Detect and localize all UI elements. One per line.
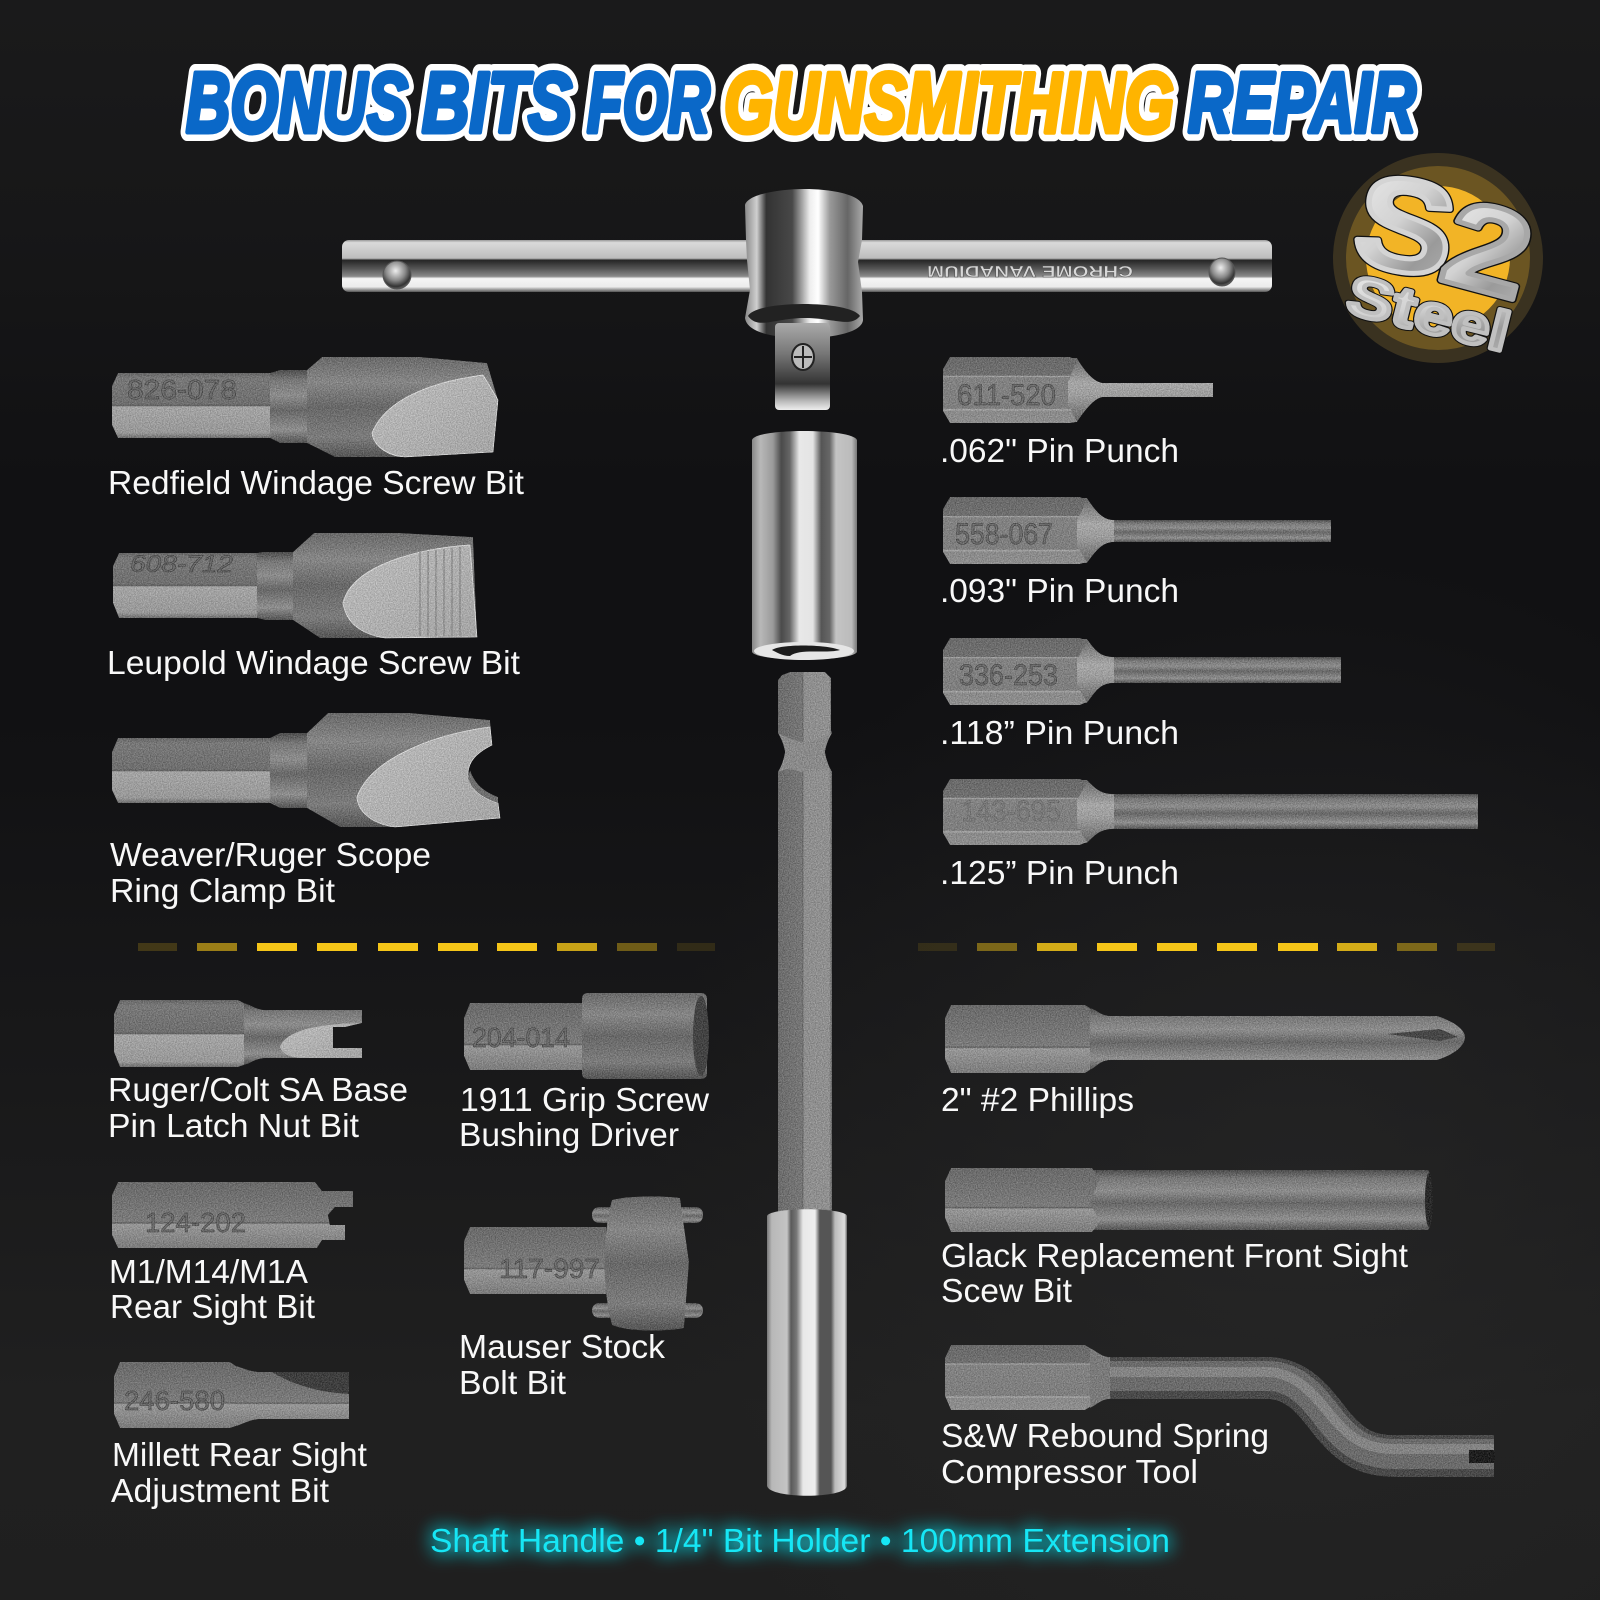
footer caption: Shaft Handle • 1/4" Bit Holder • 100mm Extension [430, 1522, 1170, 1559]
icon: Ruger/Colt bit [114, 1000, 362, 1067]
title blue words [186, 56, 1416, 151]
label line 2: Bushing Driver [459, 1116, 679, 1153]
bit: Ruger/Colt SA [108, 1000, 408, 1144]
label line 2: Pin Latch Nut Bit [108, 1107, 359, 1144]
label: Leupold Windage Screw Bit [107, 644, 520, 681]
bit: .062 pin punch [940, 357, 1213, 469]
bit: Mauser stock bolt [459, 1196, 703, 1401]
icon: Millett bit: 246-580 [124, 1385, 225, 1416]
label: 1911 Grip Screw [460, 1081, 709, 1118]
label: Millett Rear Sight [112, 1436, 367, 1473]
handle bar [342, 240, 1272, 292]
label line 2: Rear Sight Bit [110, 1288, 315, 1325]
label line 2: Compressor Tool [941, 1453, 1198, 1490]
icon: .062 punch [943, 357, 1213, 423]
bit holder socket [752, 431, 857, 660]
label: Ruger/Colt SA Base [108, 1071, 408, 1108]
bar screw left [383, 261, 411, 289]
title outline: BONUS [186, 56, 408, 151]
icon: Mauser bit [464, 1196, 703, 1331]
label: .118” Pin Punch [940, 714, 1179, 751]
icon: Phillips bit [945, 1005, 1465, 1073]
icon: .125 punch [943, 779, 1478, 845]
icon: .093 punch [943, 497, 1331, 564]
icon: Weaver bit [112, 713, 500, 827]
badge: S2 Steel [1333, 144, 1546, 364]
title blue words: REPAIR [1188, 56, 1416, 151]
icon: Redfield bit: 826-078 [127, 374, 237, 405]
bit: .093 pin punch [940, 497, 1331, 609]
icon: Redfield bit [112, 357, 498, 457]
label: .125” Pin Punch [940, 854, 1179, 891]
left dashed divider [138, 943, 715, 951]
icon: .118 punch: 336-253 [959, 659, 1058, 692]
bit: Leupold windage [107, 533, 520, 681]
icon: M1 bit [112, 1182, 353, 1248]
bit: 1911 grip screw [459, 993, 709, 1153]
title outline: BITS [422, 56, 572, 151]
icon: .062 punch: 611-520 [957, 379, 1056, 412]
badge Steel: Steel [1341, 263, 1516, 364]
slider socket [745, 189, 863, 338]
bit: .125 pin punch [940, 779, 1478, 891]
badge Steel outline: Steel [1341, 263, 1516, 364]
title blue words: BITS [422, 56, 572, 151]
bar screw right [1209, 258, 1235, 286]
bit: Weaver/Ruger scope ring clamp [110, 713, 500, 909]
label line 2: Ring Clamp Bit [110, 872, 335, 909]
title blue words: BONUS [186, 56, 408, 151]
label: S&W Rebound Spring [941, 1417, 1269, 1454]
right dashed divider [918, 943, 1495, 951]
icon: Mauser bit: 117-997 [499, 1253, 600, 1284]
T-handle [342, 189, 1272, 410]
extension holder sleeve [767, 1209, 847, 1496]
bit: 2in #2 Phillips [941, 1005, 1465, 1118]
title outline: GUNSMITHING [724, 56, 1174, 151]
label line 2: Adjustment Bit [111, 1472, 329, 1509]
socket rim shine [748, 304, 860, 323]
bit: S&W rebound spring compressor [941, 1345, 1495, 1490]
label line 2: Bolt Bit [459, 1364, 566, 1401]
bit: M1/M14/M1A [109, 1182, 353, 1325]
icon: .118 punch [943, 638, 1341, 705]
badge S: S [1344, 144, 1467, 307]
title yellow word: GUNSMITHING [724, 56, 1174, 151]
bar engraving: CHROME VANADIUM [927, 262, 1133, 279]
100mm hex extension [778, 672, 832, 1214]
label: .093" Pin Punch [940, 572, 1179, 609]
title [186, 56, 1416, 151]
icon: 1911 bit [464, 993, 709, 1079]
icon: 1911 bit: 204-014 [472, 1022, 570, 1053]
icon: Leupold bit: 608-712 [130, 551, 233, 578]
label: Mauser Stock [459, 1328, 665, 1365]
label: Weaver/Ruger Scope [110, 836, 431, 873]
icon: S&W tool [945, 1345, 1495, 1463]
label: .062" Pin Punch [940, 432, 1179, 469]
icon: Leupold bit [113, 533, 477, 638]
title blue words: FOR [587, 56, 710, 151]
bit: Redfield windage [108, 357, 524, 501]
bit: Millett rear sight [111, 1362, 367, 1509]
icon: .125 punch: 143-695 [961, 795, 1061, 828]
bit: .118 pin punch [940, 638, 1341, 751]
icon: M1 bit: 124-202 [145, 1207, 246, 1238]
title outline: FOR [587, 56, 710, 151]
badge 2 outline: 2 [1429, 173, 1546, 327]
icon: .093 punch: 558-067 [955, 518, 1053, 551]
label: Glack Replacement Front Sight [941, 1237, 1408, 1274]
label: Redfield Windage Screw Bit [108, 464, 524, 501]
label line 2: Scew Bit [941, 1272, 1072, 1309]
bit: Glock front sight [941, 1168, 1433, 1309]
badge S outline: S [1344, 144, 1467, 307]
icon: Millett bit [114, 1362, 349, 1428]
label: 2" #2 Phillips [941, 1081, 1134, 1118]
title outline: REPAIR [1188, 56, 1416, 151]
label: M1/M14/M1A [109, 1253, 308, 1290]
badge 2: 2 [1429, 173, 1546, 327]
square drive [775, 323, 830, 410]
title outline [186, 56, 1416, 151]
icon: front sight bit [945, 1168, 1433, 1232]
